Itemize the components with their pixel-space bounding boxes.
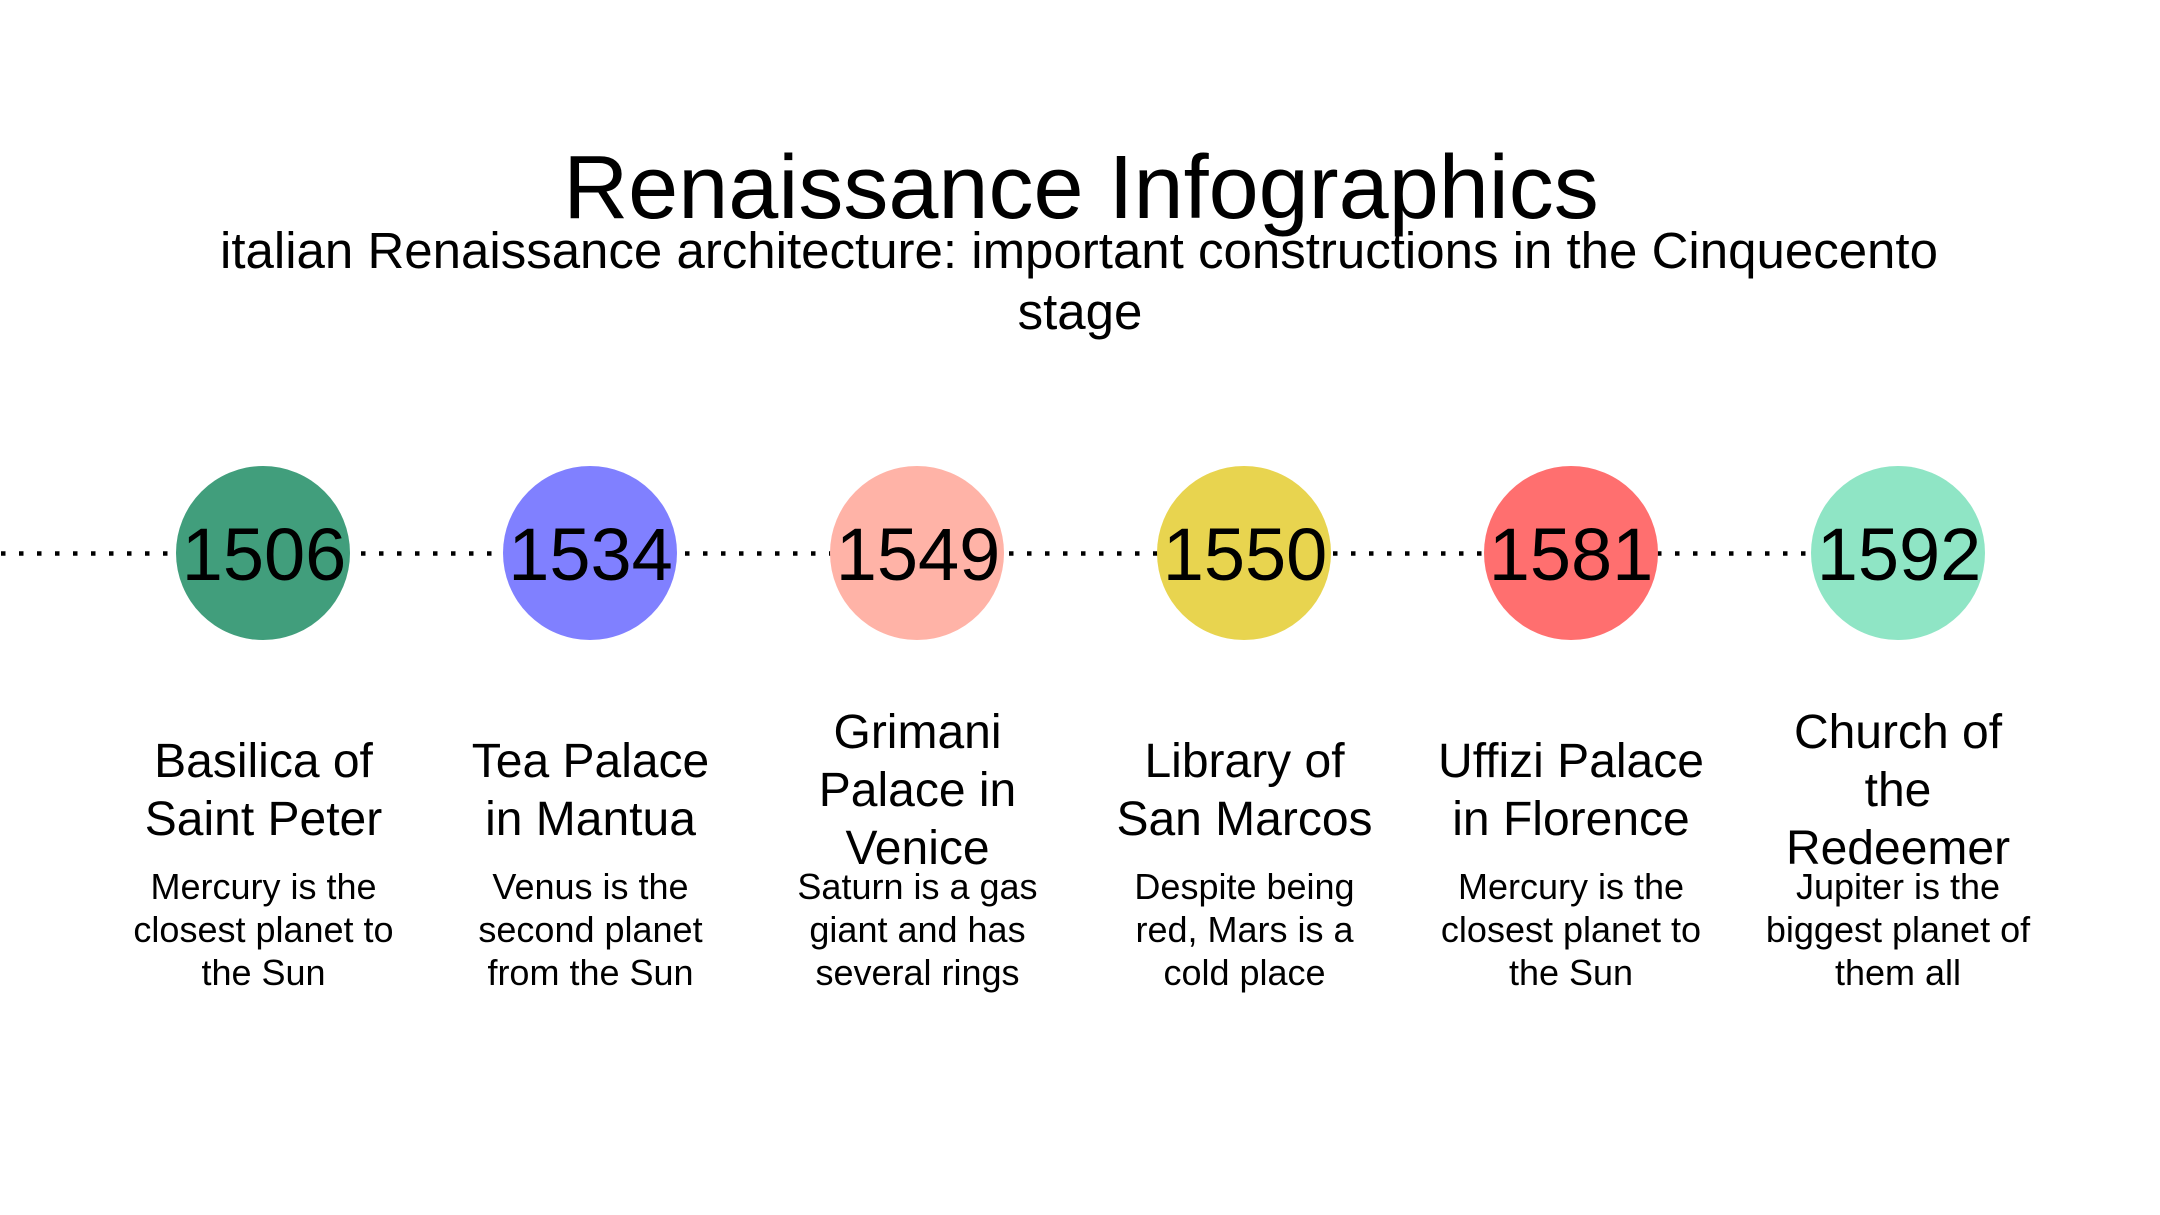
description: Mercury is the (150, 866, 377, 907)
description: giant and has (809, 909, 1026, 950)
description: the Sun (201, 952, 326, 993)
description: from the Sun (487, 952, 694, 993)
heading: Church of the Redeemer (1786, 706, 2010, 875)
description: Despite being (1134, 866, 1355, 907)
heading: Uffizi Palace in Florence: Uffizi Palace (1438, 735, 1704, 788)
year badge 1534: 1534 (508, 513, 673, 596)
description (133, 866, 394, 993)
subtitle: italian Renaissance architecture: important constructions in the Cinquecento (220, 222, 1938, 279)
panel: 1550 (1116, 466, 1373, 993)
description: second planet (478, 909, 703, 950)
panel: 1549 (797, 466, 1038, 993)
year badge 1550 (1157, 466, 1331, 640)
heading: Tea Palace in Mantua (472, 735, 709, 846)
description: Jupiter is the (1796, 866, 2000, 907)
year badge 1506: 1506 (182, 513, 346, 596)
year badge 1534 (503, 466, 677, 640)
heading: Grimani Palace in Venice: Venice (845, 822, 990, 875)
description: biggest planet of (1766, 909, 2031, 950)
description: closest planet to (133, 909, 394, 950)
heading: Uffizi Palace in Florence (1438, 735, 1704, 846)
panel: 1506 (133, 466, 394, 993)
description: several rings (815, 952, 1020, 993)
heading: Grimani Palace in Venice: Grimani (833, 706, 1002, 759)
heading: Library of San Marcos: Library of (1144, 735, 1345, 788)
subtitle: stage (1018, 283, 1142, 340)
heading: Basilica of Saint Peter: Basilica of (154, 735, 374, 788)
dotted timeline (0, 551, 1900, 556)
title: Renaissance Infographics (563, 138, 1599, 238)
description (1441, 866, 1701, 993)
heading: Church of the Redeemer: the (1865, 764, 1931, 817)
description (797, 866, 1038, 993)
panel: 1592 (1766, 466, 2031, 993)
subtitle (220, 222, 1938, 340)
description (1134, 866, 1355, 993)
year badge 1592: 1592 (1817, 513, 1981, 596)
heading: Basilica of Saint Peter (145, 735, 382, 846)
description: closest planet to (1441, 909, 1701, 950)
description (1766, 866, 2031, 993)
description: the Sun (1509, 952, 1633, 993)
year badge 1581: 1581 (1489, 513, 1653, 596)
year badge 1549: 1549 (836, 513, 1000, 596)
description: Mercury is the (1458, 866, 1684, 907)
heading: Library of San Marcos (1116, 735, 1373, 846)
heading: Uffizi Palace in Florence: in Florence (1452, 793, 1690, 846)
year badge 1549 (830, 466, 1004, 640)
heading: Tea Palace in Mantua: Tea Palace (472, 735, 709, 788)
heading: Basilica of Saint Peter: Saint Peter (145, 793, 382, 846)
description: Saturn is a gas (797, 866, 1038, 907)
description: red, Mars is a (1135, 909, 1355, 950)
year badge 1581 (1484, 466, 1658, 640)
heading: Grimani Palace in Venice (819, 706, 1016, 875)
heading: Church of the Redeemer: Redeemer (1786, 822, 2010, 875)
year badge 1592 (1811, 466, 1985, 640)
description: them all (1835, 952, 1961, 993)
panel: 1534 (472, 466, 709, 993)
heading: Church of the Redeemer: Church of (1794, 706, 2003, 759)
panel: 1581 (1438, 466, 1704, 993)
year badge 1506 (176, 466, 350, 640)
description: cold place (1163, 952, 1326, 993)
heading: Tea Palace in Mantua: in Mantua (485, 793, 696, 846)
year badge 1550: 1550 (1163, 513, 1327, 596)
description (478, 866, 703, 993)
heading: Library of San Marcos: San Marcos (1116, 793, 1373, 846)
description: Venus is the (492, 866, 689, 907)
heading: Grimani Palace in Venice: Palace in (819, 764, 1016, 817)
